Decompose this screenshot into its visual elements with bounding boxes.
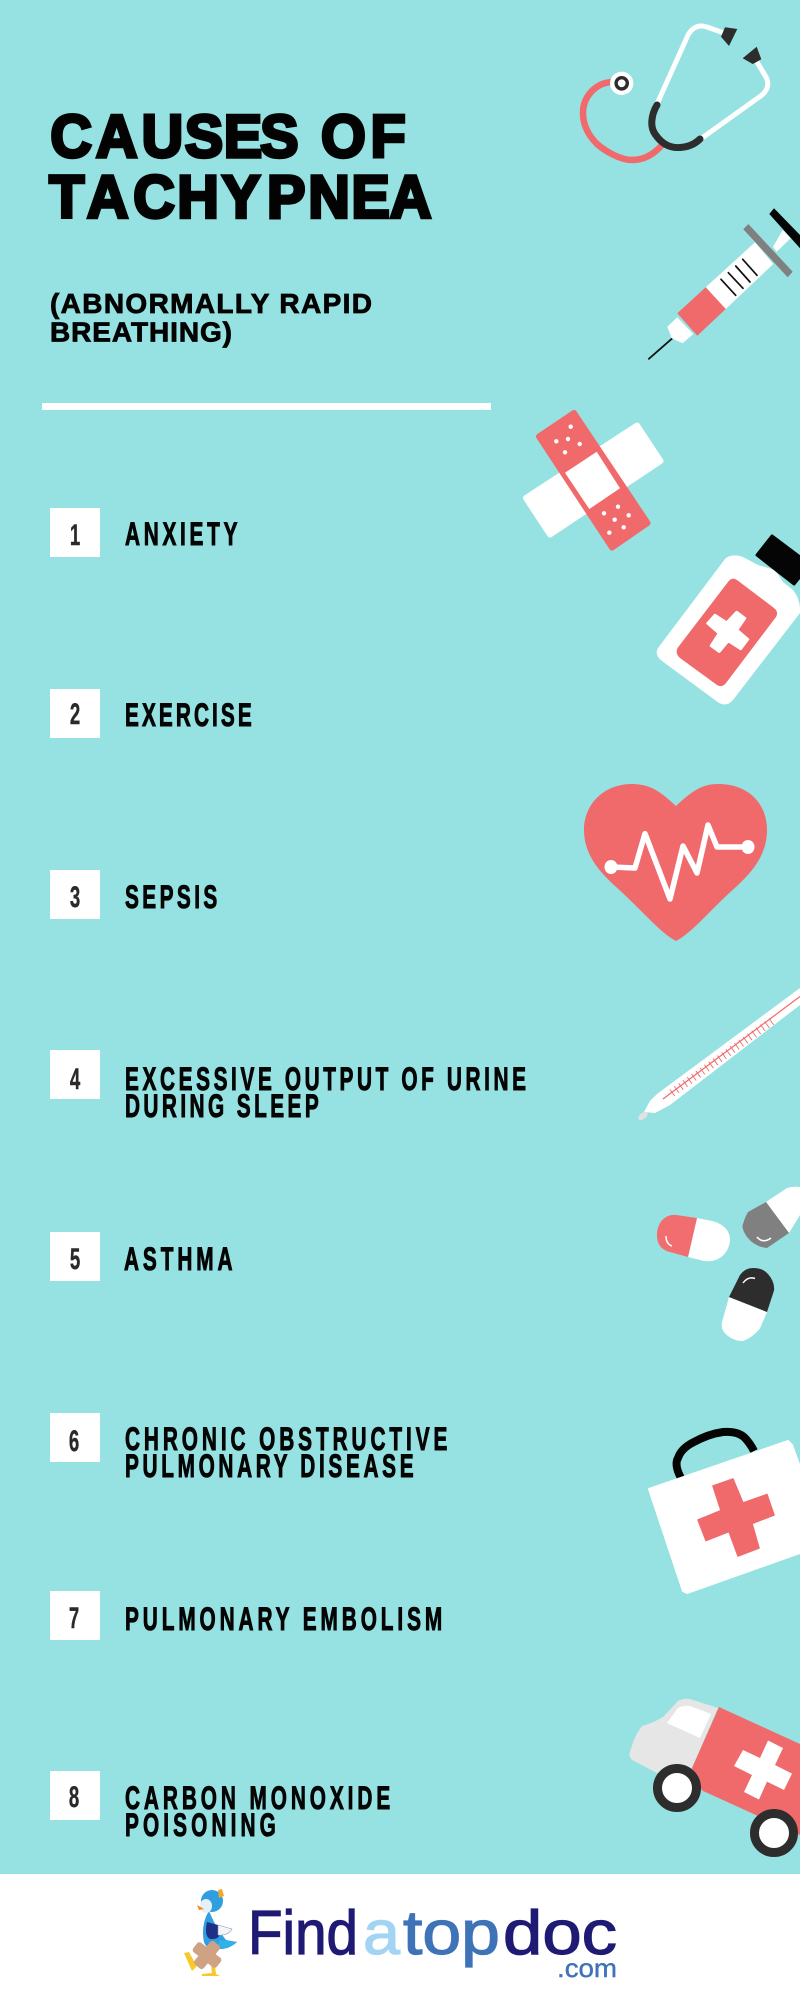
- icon: thermometer: [637, 988, 800, 1122]
- icon: first aid kit: [649, 1432, 800, 1593]
- item 7: pulmonary embolism: PULMONARY EMBOLISM: [125, 1602, 442, 1637]
- item 3: sepsis: [50, 870, 217, 919]
- title: TACHYPNEA: [49, 164, 431, 231]
- item 8: carbon monoxide poisoning: POISONING: [125, 1808, 276, 1843]
- title: [49, 104, 431, 231]
- item 1: anxiety: ANXIETY: [125, 517, 237, 552]
- logo wordmark: [248, 1899, 617, 1983]
- icon: bandage: [526, 413, 660, 548]
- icon: heart with pulse line: [584, 784, 767, 941]
- title: CAUSES OF: [50, 104, 406, 170]
- item 4: excessive output of urine during sleep: [50, 1050, 526, 1124]
- item 5: asthma: ASTHMA: [124, 1242, 233, 1277]
- item 6: chronic obstructive pulmonary disease: PULMONARY DISEASE: [125, 1449, 414, 1484]
- icon: pills: [657, 1187, 800, 1341]
- footer band: [0, 1874, 800, 2000]
- logo wordmark: a: [363, 1899, 401, 1968]
- subtitle: [50, 288, 372, 348]
- item 1: anxiety: [50, 508, 237, 557]
- logo wordmark: top: [403, 1899, 500, 1968]
- item 8: carbon monoxide poisoning: CARBON MONOXIDE: [125, 1781, 390, 1816]
- item 7: pulmonary embolism: 7: [69, 1602, 79, 1635]
- item 3: sepsis: SEPSIS: [125, 880, 217, 915]
- item 3: sepsis: 3: [70, 881, 80, 914]
- icon: syringe: [648, 208, 800, 359]
- icon: duck mascot: [184, 1889, 237, 1976]
- subtitle: (ABNORMALLY RAPID: [50, 288, 372, 319]
- item 6: chronic obstructive pulmonary disease: [50, 1413, 447, 1484]
- icon: medicine bottle: [657, 536, 800, 704]
- logo wordmark: Find: [248, 1899, 358, 1968]
- item 1: anxiety: 1: [70, 519, 80, 552]
- item 8: carbon monoxide poisoning: 8: [69, 1781, 79, 1814]
- icon: ambulance: [629, 1699, 800, 1852]
- item 7: pulmonary embolism: [50, 1591, 442, 1640]
- item 6: chronic obstructive pulmonary disease: 6: [69, 1425, 79, 1458]
- icon: stethoscope: [583, 26, 768, 160]
- logo wordmark: .com: [557, 1953, 617, 1983]
- item 4: excessive output of urine during sleep: DURING SLEEP: [125, 1089, 319, 1124]
- item 4: excessive output of urine during sleep: EXCESSIVE OUTPUT OF URINE: [125, 1062, 526, 1097]
- item 8: carbon monoxide poisoning: [50, 1771, 390, 1843]
- item 6: chronic obstructive pulmonary disease: CHRONIC OBSTRUCTIVE: [125, 1422, 447, 1457]
- item 2: exercise: 2: [70, 698, 80, 731]
- item 5: asthma: 5: [70, 1243, 80, 1276]
- logo wordmark: doc: [503, 1899, 617, 1968]
- item 5: asthma: [50, 1232, 233, 1281]
- item 2: exercise: EXERCISE: [125, 698, 252, 733]
- subtitle: BREATHING): [50, 316, 232, 348]
- item 4: excessive output of urine during sleep: 4: [70, 1063, 80, 1096]
- item 2: exercise: [50, 689, 252, 738]
